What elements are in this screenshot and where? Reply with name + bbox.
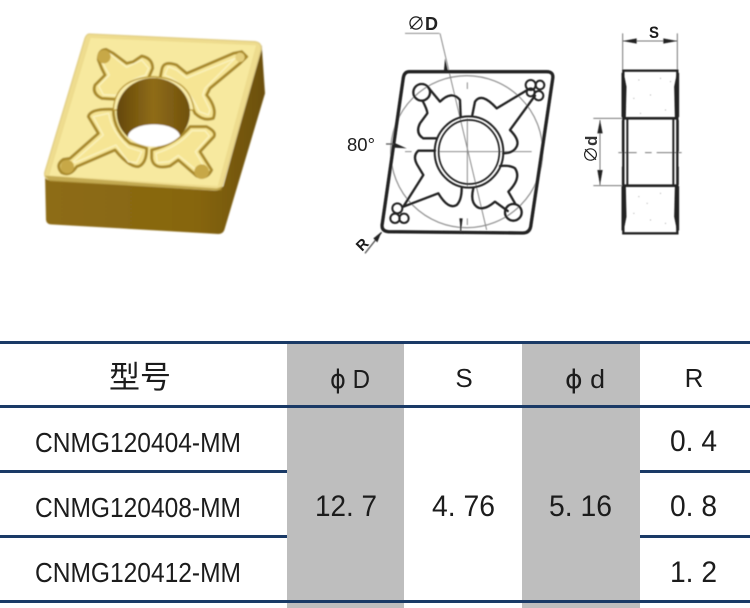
icon: gold insert 3D render — [45, 34, 265, 234]
label: S dimension: S — [649, 23, 659, 42]
table header: S: S — [455, 363, 473, 393]
label: phi D: ∅D — [407, 14, 438, 34]
dimension arrowheads — [597, 38, 677, 185]
groove highlights — [73, 53, 235, 172]
label: phi d dimension: ∅d — [582, 136, 601, 163]
centre lines — [405, 33, 532, 230]
table: rules — [0, 341, 750, 603]
table value: R 1.2: 1. 2 — [670, 556, 717, 589]
label: 80 degrees: 80° — [347, 135, 375, 155]
table row: model 1: CNMG120404-MM — [35, 427, 241, 458]
through hole — [113, 77, 194, 110]
side outline — [623, 71, 677, 233]
centre hole — [435, 116, 503, 188]
label: R: R — [353, 235, 373, 255]
groove: top right — [160, 52, 247, 119]
table row: model 3: CNMG120412-MM — [35, 557, 241, 588]
corner clovers — [390, 80, 544, 223]
table value: R 0.4: 0. 4 — [670, 425, 717, 458]
inscribed circle — [391, 76, 543, 228]
insert body side — [45, 45, 265, 234]
table header: phi d: ϕ d — [565, 364, 605, 395]
table: grey column bands — [287, 342, 640, 608]
groove: bottom left — [59, 109, 147, 174]
dimension lines — [593, 33, 682, 186]
table value: phi d: 5. 16 — [549, 490, 612, 523]
insert top face — [45, 34, 261, 190]
table header: phi D: ϕ D — [330, 364, 370, 395]
groove: top left — [94, 49, 153, 99]
table value: phi D: 12. 7 — [315, 490, 377, 523]
table header: model: 型号 — [109, 360, 171, 395]
groove: bottom right — [152, 127, 215, 177]
table row: model 2: CNMG120408-MM — [35, 492, 241, 523]
chip breaker grooves — [59, 49, 247, 177]
groove corner pockets — [61, 50, 245, 179]
table value: R 0.8: 0. 8 — [670, 490, 717, 523]
chip breaker outline — [403, 84, 535, 221]
technical drawing: side view — [593, 33, 682, 233]
technical drawing: top view — [365, 33, 553, 253]
table value: S: 4. 76 — [432, 490, 495, 523]
table header: R: R — [685, 363, 703, 393]
side thick edges — [622, 73, 679, 230]
insert outline — [382, 72, 553, 233]
stipple texture — [633, 78, 671, 223]
dimension arrows — [365, 144, 461, 253]
